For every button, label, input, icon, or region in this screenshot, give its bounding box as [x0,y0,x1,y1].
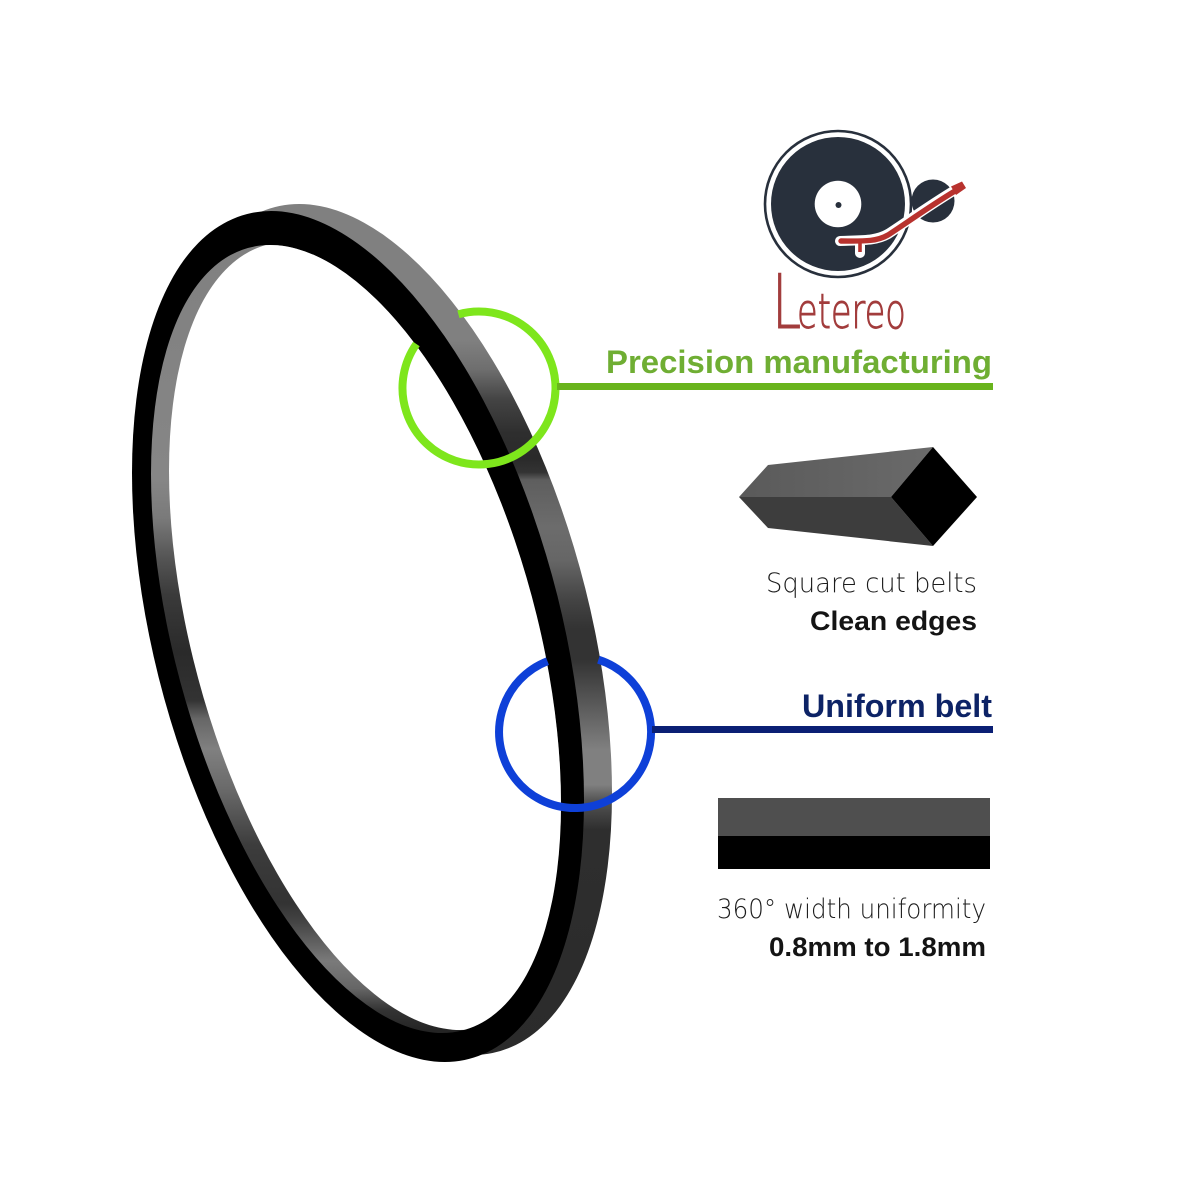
text: width uniformity: 0.8mm to 1.8mm [769,932,986,962]
icon: tonearm [840,182,966,253]
white opening of the belt [169,245,561,1030]
icon: turntable record [765,131,954,277]
text: square cut belts [766,568,977,636]
heading: Precision manufacturing [606,344,992,380]
icon: square cut belt prism [739,447,977,546]
belt black front face [132,80,584,1193]
text: square cut belts: Clean edges [810,606,977,636]
brand name: Letereo [772,260,906,347]
belt inner side face, left [151,245,561,1033]
text: width uniformity: 360° width uniformity [717,894,986,925]
green leader line [557,383,993,390]
blue leader line [652,726,993,733]
heading: Uniform belt [802,688,992,724]
belt ring illustration [132,204,612,1062]
brand logo: Letereo turntable [765,131,966,347]
icon: flat belt section [718,798,990,869]
callout circle: blue, passing behind the top of the belt [499,660,651,808]
callout circle: green, passing behind the top of the belt [402,311,555,464]
text: width uniformity [717,894,986,962]
callout: precision manufacturing [557,344,993,390]
belt outer side face, right [262,204,612,1055]
text: square cut belts: Square cut belts [766,568,977,599]
callout: uniform belt [652,688,993,733]
